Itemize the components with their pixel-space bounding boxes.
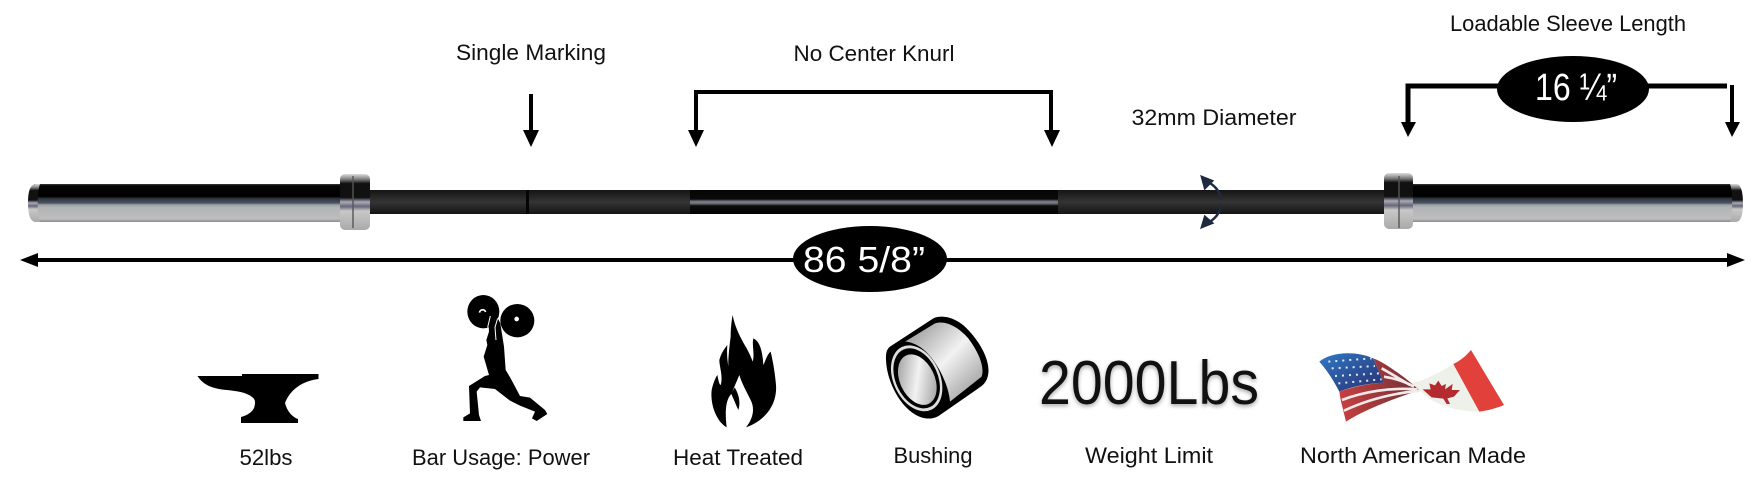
bracket: no center knurl — [688, 92, 1060, 147]
badge: sleeve length value: 16 ¼” — [1535, 67, 1617, 109]
arrow: single marking — [523, 94, 539, 147]
icon: rotation arrow — [1202, 177, 1221, 227]
dimension arrow: overall length — [20, 253, 1745, 267]
bracket: sleeve length — [1401, 85, 1740, 137]
icon: lifter — [463, 295, 547, 421]
label: heat treated: Heat Treated — [673, 445, 803, 470]
barbell — [28, 173, 1743, 230]
badge: sleeve length value — [1497, 56, 1649, 122]
label: single marking: Single Marking — [456, 40, 606, 65]
badge: overall length value — [793, 226, 947, 292]
badge: overall length value: 86 5/8” — [803, 239, 925, 280]
label: bar usage: Bar Usage: Power — [412, 445, 590, 470]
label: diameter: 32mm Diameter — [1132, 105, 1296, 130]
label: weight: 52lbs — [240, 445, 292, 470]
label: no center knurl: No Center Knurl — [794, 41, 954, 66]
icon: bushing — [881, 317, 989, 420]
icon: flags — [1319, 350, 1504, 422]
label: bushing: Bushing — [894, 443, 972, 468]
label: weight limit: Weight Limit — [1085, 443, 1213, 468]
label: loadable sleeve length: Loadable Sleeve Length — [1450, 11, 1686, 36]
icon: anvil — [198, 374, 318, 423]
stat: weight limit value: 2000Lbs — [1039, 349, 1259, 418]
icon: flame — [711, 315, 776, 427]
label: north american made: North American Made — [1300, 443, 1526, 468]
